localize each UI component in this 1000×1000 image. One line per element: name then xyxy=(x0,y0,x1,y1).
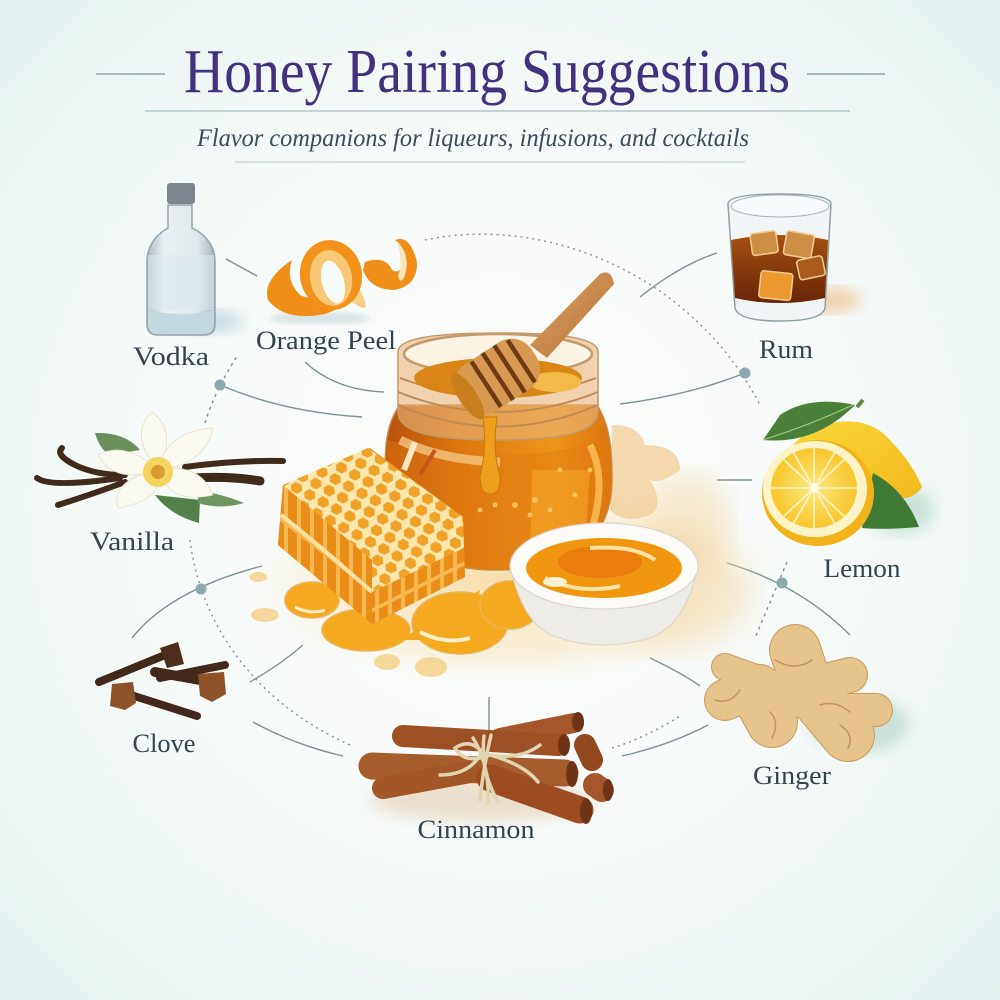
label: Clove: Clove xyxy=(132,729,196,758)
honey puddle xyxy=(285,581,540,654)
icon: ginger xyxy=(715,650,910,753)
honey dipper xyxy=(445,272,614,494)
label: Vanilla: Vanilla xyxy=(90,527,175,556)
label: Orange Peel: Orange Peel xyxy=(256,326,396,355)
honey splash wash xyxy=(249,425,750,685)
icon: vodka bottle xyxy=(147,183,243,335)
icon: lemon xyxy=(762,400,935,546)
label: Rum: Rum xyxy=(759,335,813,364)
jar rim xyxy=(398,333,598,440)
icon: orange peel xyxy=(267,235,417,324)
label: Ginger: Ginger xyxy=(753,761,831,790)
honey bowl xyxy=(510,523,698,645)
dashed ring and connector lines xyxy=(132,234,850,756)
label: Vodka: Vodka xyxy=(133,342,210,371)
honeycomb xyxy=(278,448,465,624)
title: Honey Pairing Suggestions xyxy=(184,38,790,106)
icon: clove xyxy=(99,642,226,716)
label: Lemon: Lemon xyxy=(824,554,900,583)
icon: rum glass xyxy=(728,194,861,321)
icon: vanilla xyxy=(37,412,283,523)
icon: cinnamon xyxy=(370,712,613,824)
subtitle: Flavor companions for liqueurs, infusions, and cocktails xyxy=(196,125,749,152)
honey jar xyxy=(385,272,614,570)
label: Cinnamon: Cinnamon xyxy=(418,815,534,844)
